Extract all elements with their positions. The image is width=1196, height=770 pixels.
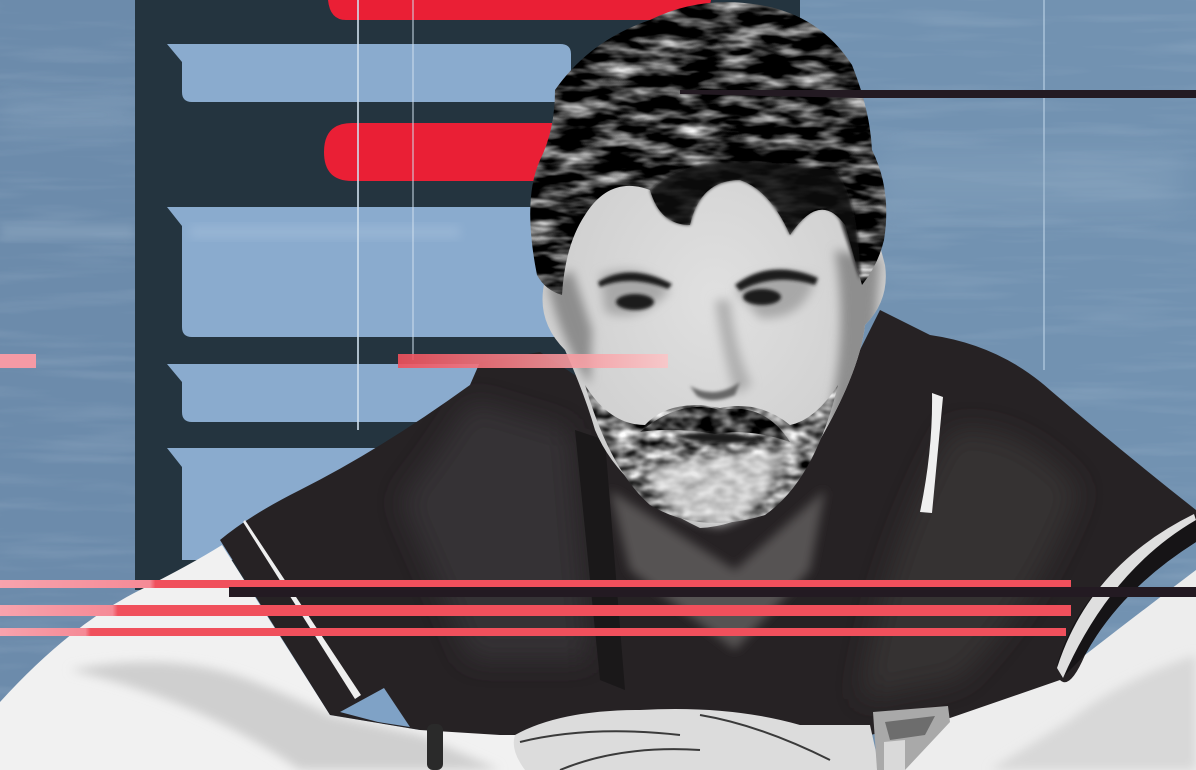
red-to-pink bar across face: [398, 354, 668, 368]
white trim right sleeve: [1057, 514, 1196, 678]
dark line: [229, 587, 1196, 597]
right arm shading: [990, 655, 1196, 770]
nose side: [715, 300, 752, 395]
left brow: [598, 272, 672, 289]
right cheek shade: [825, 250, 880, 430]
beard white chin: [645, 450, 785, 526]
panel: top red bar: [328, 0, 711, 20]
beard: [585, 385, 838, 523]
mustache: [640, 407, 790, 442]
bracelet: [427, 724, 443, 770]
red line 3: [0, 628, 1066, 636]
red line 1: [0, 580, 1071, 588]
panel: texture on blocks: [190, 0, 460, 430]
face: [542, 130, 886, 528]
dark column: [135, 0, 800, 590]
left arm shading: [70, 662, 500, 770]
neck V: [610, 490, 825, 650]
brow shade right: [735, 272, 815, 318]
shirt: [220, 310, 1196, 735]
left eye: [616, 294, 654, 310]
left cheek shade: [548, 270, 592, 385]
mouth shadow: [672, 433, 765, 443]
shirt tones: [400, 400, 1080, 700]
pink bar left: [0, 354, 36, 368]
left arm: [0, 545, 530, 770]
left chest tone: [400, 400, 590, 660]
face shadows: [548, 250, 880, 430]
panel: light blue block 3: [167, 364, 480, 422]
red line 2: [0, 605, 1071, 616]
hair shadow: [650, 161, 860, 280]
right eye: [743, 289, 781, 305]
placket: [575, 430, 625, 690]
nose base: [690, 382, 740, 400]
panel: light blue block 4: [167, 448, 400, 560]
dark line top right: [680, 90, 1196, 98]
panel: light blue block 2: [167, 207, 560, 337]
finger lines: [520, 715, 830, 770]
collar stripe: [920, 393, 943, 513]
right brow: [735, 269, 818, 291]
brow shade: [600, 270, 670, 316]
right chest tone: [860, 429, 1080, 700]
hands: [514, 709, 880, 770]
panel: red bar middle: [324, 123, 570, 181]
right arm: [870, 570, 1196, 770]
white trim left sleeve: [243, 520, 361, 699]
sleeve band right: [1057, 515, 1196, 678]
blue gap under sleeve: [340, 688, 410, 727]
hair mass: [530, 2, 886, 295]
watch: [873, 706, 950, 770]
panel: light blue block 1: [167, 44, 571, 102]
